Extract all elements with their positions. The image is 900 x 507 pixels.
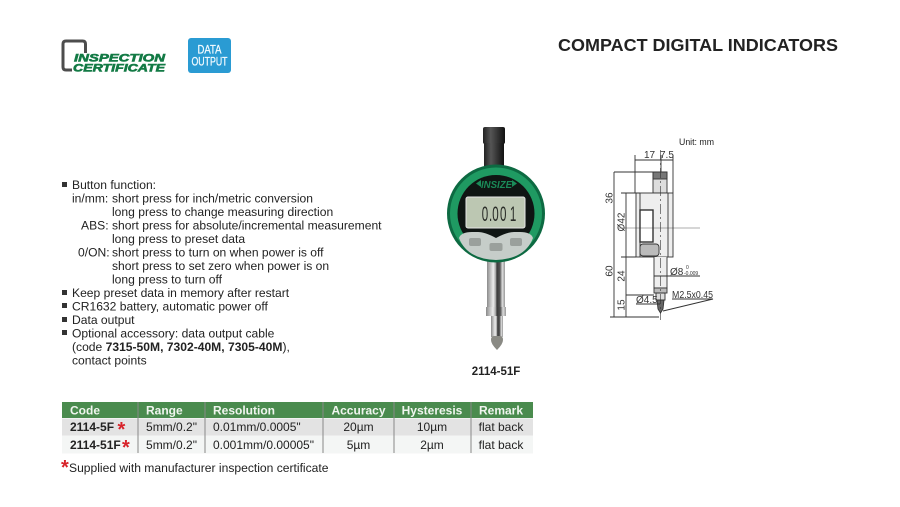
- text block: features list: (code 7315-50M, 7302-40M, 7305-40M),: [72, 340, 290, 354]
- text block: features list: [62, 178, 382, 368]
- icon: data output badge: OUTPUT: [192, 56, 228, 68]
- text block: features list: Optional accessory: data output cable: [72, 326, 275, 340]
- text block: features list: Data output: [72, 313, 135, 327]
- label: dimensions: Ø8: [670, 267, 684, 278]
- table row: 2114-51F: flat back: [479, 438, 524, 452]
- table header: [62, 402, 533, 418]
- footnote: *: [61, 457, 69, 479]
- label: dimensions: 60: [604, 265, 616, 277]
- technical drawing: [604, 150, 713, 320]
- table row: 2114-5F: 10µm: [417, 420, 447, 434]
- text block: features list: ABS:: [81, 218, 109, 232]
- label: dimensions: 7.5: [660, 150, 674, 161]
- label: dimensions: [604, 150, 713, 311]
- label: dimensions: 0: [686, 265, 689, 271]
- label: dimensions: Ø4.5: [636, 295, 658, 306]
- label: dimensions: 36: [604, 192, 616, 204]
- text: unit label: Unit: mm: [679, 137, 714, 147]
- table header: Resolution: [213, 404, 275, 418]
- icon: inspection certificate logo: INSPECTION: [74, 52, 166, 64]
- table row: 2114-51F: *: [122, 437, 130, 459]
- table row: 2114-5F: 2114-5F: [70, 420, 114, 434]
- table header: Range: [146, 404, 183, 418]
- table row: 2114-51F: 5µm: [347, 438, 370, 452]
- label: dimensions: 15: [616, 299, 628, 311]
- table header: Hysteresis: [402, 404, 463, 418]
- table header: Accuracy: [331, 404, 386, 418]
- text block: features list: contact points: [72, 354, 147, 368]
- label: dimensions: Ø42: [616, 212, 628, 231]
- text block: features list: 0/ON:: [78, 246, 110, 260]
- table row: 2114-51F: 5mm/0.2": [146, 438, 197, 452]
- label: dimensions: M2.5x0.45: [672, 290, 713, 301]
- table row: 2114-5F: 20µm: [343, 420, 374, 434]
- table row: 2114-5F: *: [118, 419, 126, 441]
- icon: data output badge: [188, 38, 231, 73]
- text block: features list: short press for absolute/incremental measurement: [112, 218, 382, 232]
- text block: features list: short press to turn on when power is off: [112, 246, 324, 260]
- table row: 2114-51F: 2114-51F: [70, 438, 121, 452]
- footnote: Supplied with manufacturer inspection certificate: [69, 461, 329, 475]
- text block: features list: in/mm:: [72, 192, 108, 206]
- text block: features list: long press to turn off: [112, 272, 223, 286]
- table row: 2114-5F: 5mm/0.2": [146, 420, 197, 434]
- label: dimensions: 24: [616, 270, 628, 282]
- table header: Code: [70, 404, 100, 418]
- footnote: [61, 457, 329, 479]
- text block: features list: CR1632 battery, automatic power off: [72, 300, 268, 314]
- text block: features list: short press for inch/metric conversion: [112, 192, 313, 206]
- table row: 2114-51F: 0.001mm/0.00005": [213, 438, 314, 452]
- table row: 2114-5F: 0.01mm/0.0005": [213, 420, 301, 434]
- icon: inspection certificate logo: [63, 41, 166, 74]
- table: product specifications: [62, 402, 533, 459]
- table header: Remark: [479, 404, 523, 418]
- table row: 2114-5F: [62, 418, 533, 441]
- icon: data output badge: DATA: [198, 44, 222, 56]
- text block: features list: long press to preset data: [112, 232, 245, 246]
- title: COMPACT DIGITAL INDICATORS: [558, 35, 838, 55]
- icon: digital indicator product photo: INSIZE: [481, 180, 512, 191]
- text block: features list: Button function:: [72, 178, 156, 192]
- text block: features list: long press to change measuring direction: [112, 205, 333, 219]
- label: dimensions: 17: [644, 150, 656, 161]
- icon: digital indicator product photo: [447, 127, 545, 350]
- table row: 2114-51F: 2µm: [420, 438, 444, 452]
- table row: 2114-5F: flat back: [479, 420, 524, 434]
- label: model number: 2114-51F: [472, 366, 520, 378]
- icon: inspection certificate logo: CERTIFICATE: [73, 62, 166, 74]
- table row: 2114-51F: [62, 436, 533, 459]
- text block: features list: Keep preset data in memory after restart: [72, 286, 290, 300]
- text block: features list: short press to set zero when power is on: [112, 259, 329, 273]
- icon: digital indicator product photo: 0.001: [482, 202, 516, 226]
- label: dimensions: -0.009: [684, 271, 698, 277]
